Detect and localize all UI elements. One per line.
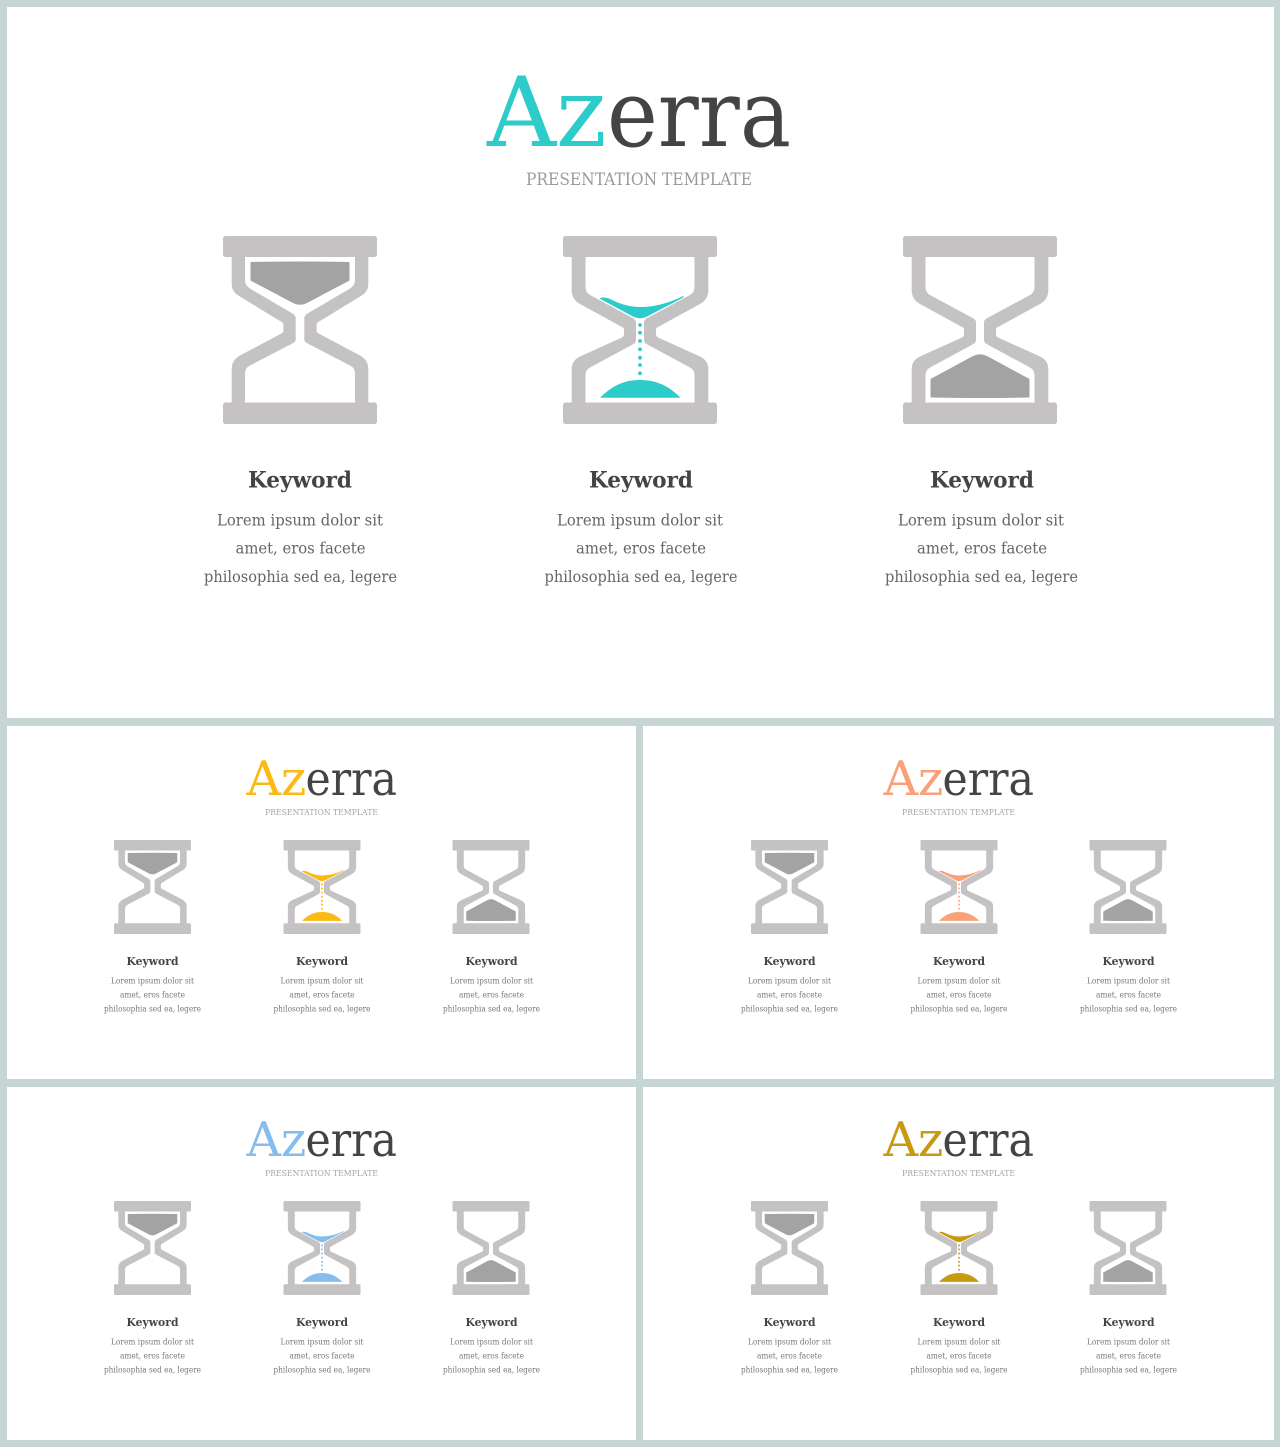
text block: column 2: philosophia sed ea, legere [274, 1366, 371, 1374]
text block: column 2: Keyword [589, 468, 693, 494]
title: Azerra gold: erra [942, 1113, 1034, 1167]
text block: column 2: Lorem ipsum dolor sit [557, 510, 724, 530]
text block: column 1: philosophia sed ea, legere [741, 1004, 838, 1014]
text block: column 3: Keyword [1102, 955, 1155, 968]
text block: column 2: philosophia sed ea, legere [910, 1004, 1008, 1014]
text block: column 2: amet, eros facete [926, 1352, 992, 1360]
text block: column 2: Lorem ipsum dolor sit [280, 1338, 364, 1346]
text block: column 1: Keyword [126, 955, 179, 968]
title: Azerra orange [882, 751, 1034, 807]
text block: column 1: Lorem ipsum dolor sit [748, 1338, 832, 1346]
icon: hourglass full bottom [452, 840, 530, 934]
title: Azerra blue: Az [246, 1112, 306, 1168]
text block: column 2 [274, 1316, 371, 1374]
text block: column 3: amet, eros facete [459, 990, 524, 1000]
text block: column 1: Keyword [126, 1316, 179, 1329]
text block: column 2: Keyword [933, 955, 985, 968]
title: Azerra yellow: Az [246, 751, 306, 807]
text block: column 3: philosophia sed ea, legere [443, 1004, 540, 1014]
panel: main slide teal [7, 7, 1274, 718]
subtitle: PRESENTATION TEMPLATE [902, 808, 1015, 818]
subtitle: PRESENTATION TEMPLATE [526, 170, 752, 190]
title: Azerra gold [882, 1112, 1034, 1168]
text block: column 2 [910, 1316, 1008, 1374]
title: Azerra orange: Az [882, 751, 943, 807]
text block: column 2: Lorem ipsum dolor sit [280, 976, 364, 986]
text block: column 1: philosophia sed ea, legere [741, 1366, 838, 1374]
text block: column 1: philosophia sed ea, legere [204, 567, 397, 586]
text block: column 1 [741, 955, 838, 1014]
title: Azerra: Az [486, 57, 607, 169]
text block: column 3: philosophia sed ea, legere [1080, 1366, 1177, 1374]
text block: column 3: Lorem ipsum dolor sit [450, 1338, 534, 1346]
icon: hourglass full top [114, 840, 191, 934]
text block: column 3: philosophia sed ea, legere [1080, 1004, 1177, 1014]
icon: hourglass full bottom [903, 236, 1057, 424]
text block: column 1: Lorem ipsum dolor sit [111, 976, 195, 986]
text block: column 2 [544, 468, 738, 586]
title: Azerra [486, 57, 791, 169]
text block: column 3: Lorem ipsum dolor sit [1087, 1338, 1171, 1346]
icon: hourglass flowing orange [920, 840, 998, 934]
icon: hourglass full bottom [1090, 1201, 1166, 1295]
text block: column 3: Keyword [466, 955, 518, 968]
text block: column 3: Lorem ipsum dolor sit [898, 510, 1065, 530]
panel: yellow slide [7, 726, 636, 1079]
text block: column 2: amet, eros facete [926, 990, 992, 1000]
icon: hourglass full top [114, 1201, 191, 1295]
text block: column 1: philosophia sed ea, legere [104, 1004, 201, 1014]
text block: column 2: Keyword [933, 1316, 985, 1329]
text block: column 2: philosophia sed ea, legere [544, 567, 738, 586]
text block: column 2: Lorem ipsum dolor sit [918, 976, 1001, 986]
title: Azerra gold: Az [882, 1112, 943, 1168]
text block: column 2: philosophia sed ea, legere [274, 1004, 371, 1014]
text block: column 3: Lorem ipsum dolor sit [450, 976, 534, 986]
text block: column 3 [443, 1316, 540, 1374]
text block: column 1: Lorem ipsum dolor sit [748, 976, 832, 986]
icon: hourglass flowing yellow [284, 840, 360, 934]
text block: column 1 [741, 1316, 838, 1374]
panel: orange slide [643, 726, 1274, 1079]
text block: column 2: amet, eros facete [290, 1352, 355, 1360]
title: Azerra blue: erra [306, 1113, 397, 1167]
text block: column 1: Lorem ipsum dolor sit [111, 1338, 195, 1346]
title: Azerra: erra [607, 60, 791, 168]
title: Azerra blue [246, 1112, 397, 1168]
text block: column 3: Keyword [1102, 1316, 1155, 1329]
text block: column 2: Keyword [296, 955, 348, 968]
text block: column 3: amet, eros facete [917, 538, 1047, 558]
text block: column 1: amet, eros facete [236, 538, 366, 558]
text block: column 3 [1080, 955, 1177, 1014]
title: Azerra orange: erra [942, 752, 1034, 806]
text block: column 3 [885, 468, 1078, 586]
title: Azerra yellow: erra [306, 752, 397, 806]
text block: column 2: philosophia sed ea, legere [910, 1366, 1008, 1374]
icon: hourglass flowing blue [284, 1201, 360, 1295]
text block: column 2: amet, eros facete [576, 538, 706, 558]
text block: column 1: Keyword [248, 468, 352, 494]
text block: column 1 [204, 468, 397, 586]
panel: blue slide [7, 1087, 636, 1440]
subtitle: PRESENTATION TEMPLATE [265, 1169, 378, 1179]
text block: column 1: amet, eros facete [120, 990, 185, 1000]
text block: column 3: amet, eros facete [1096, 990, 1161, 1000]
text block: column 2: amet, eros facete [290, 990, 355, 1000]
text block: column 3: philosophia sed ea, legere [443, 1366, 540, 1374]
text block: column 2 [910, 955, 1008, 1014]
subtitle: PRESENTATION TEMPLATE [902, 1169, 1015, 1179]
text block: column 3 [443, 955, 540, 1014]
icon: hourglass full top [751, 1201, 828, 1295]
icon: hourglass full top [223, 236, 377, 424]
icon: hourglass full top [751, 840, 828, 934]
icon: hourglass full bottom [1090, 840, 1166, 934]
text block: column 1: Lorem ipsum dolor sit [217, 510, 384, 530]
icon: hourglass full bottom [452, 1201, 530, 1295]
text block: column 3: amet, eros facete [459, 1352, 524, 1360]
text block: column 2: Lorem ipsum dolor sit [918, 1338, 1001, 1346]
text block: column 3: Keyword [466, 1316, 518, 1329]
text block: column 2: Keyword [296, 1316, 348, 1329]
text block: column 2 [274, 955, 371, 1014]
text block: column 1: amet, eros facete [757, 990, 822, 1000]
panel: gold slide [643, 1087, 1274, 1440]
text block: column 1: philosophia sed ea, legere [104, 1366, 201, 1374]
icon: hourglass flowing gold [920, 1201, 998, 1295]
text block: column 1: amet, eros facete [120, 1352, 185, 1360]
text block: column 1: amet, eros facete [757, 1352, 822, 1360]
text block: column 1 [104, 1316, 201, 1374]
text block: column 3: Keyword [930, 468, 1034, 494]
icon: hourglass flowing teal [563, 236, 717, 424]
subtitle: PRESENTATION TEMPLATE [265, 808, 378, 818]
text block: column 3: amet, eros facete [1096, 1352, 1161, 1360]
text block: column 3: philosophia sed ea, legere [885, 567, 1078, 586]
text block: column 1: Keyword [764, 1316, 816, 1329]
text block: column 3 [1080, 1316, 1177, 1374]
text block: column 1: Keyword [764, 955, 816, 968]
title: Azerra yellow [246, 751, 397, 807]
text block: column 3: Lorem ipsum dolor sit [1087, 976, 1171, 986]
text block: column 1 [104, 955, 201, 1014]
